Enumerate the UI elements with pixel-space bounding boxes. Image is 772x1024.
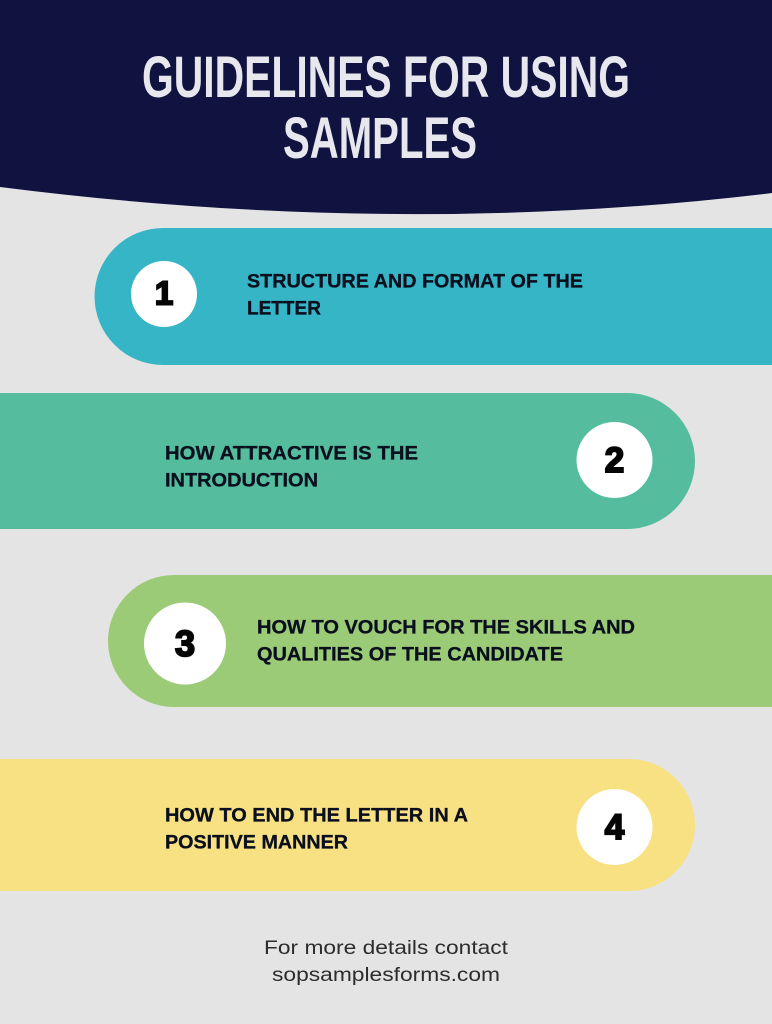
- text: step 3: QUALITIES OF THE CANDIDATE: [257, 644, 563, 666]
- title: SAMPLES: [283, 106, 477, 171]
- panel: step 3: [108, 575, 772, 707]
- panel: step 4: [0, 759, 695, 891]
- header banner: [0, 0, 772, 214]
- title: [142, 45, 630, 171]
- text: step 1: [247, 270, 583, 320]
- icon: number 3: [144, 602, 226, 684]
- text: step 4: HOW TO END THE LETTER IN A: [165, 804, 468, 826]
- footer contact text: For more details contact: [264, 938, 509, 959]
- text: step 3: HOW TO VOUCH FOR THE SKILLS AND: [257, 616, 635, 638]
- icon: number 1: 1: [155, 274, 173, 312]
- panel: step 1: [95, 228, 772, 365]
- text: step 2: HOW ATTRACTIVE IS THE: [165, 442, 418, 464]
- icon: number 2: 2: [605, 441, 624, 480]
- footer contact text: sopsamplesforms.com: [272, 965, 500, 986]
- text: step 4: [165, 804, 468, 854]
- text: step 1: LETTER: [247, 298, 321, 320]
- icon: number 1: [131, 261, 197, 327]
- text: step 2: [165, 442, 418, 492]
- text: step 3: [257, 616, 635, 666]
- icon: number 3: 3: [175, 623, 195, 664]
- icon: number 2: [576, 422, 652, 498]
- footer contact text: [264, 938, 509, 986]
- text: step 2: INTRODUCTION: [165, 470, 318, 492]
- panel: step 2: [0, 393, 695, 529]
- text: step 4: POSITIVE MANNER: [165, 832, 348, 854]
- icon: number 4: 4: [605, 808, 625, 847]
- text: step 1: STRUCTURE AND FORMAT OF THE: [247, 270, 583, 292]
- icon: number 4: [576, 789, 652, 865]
